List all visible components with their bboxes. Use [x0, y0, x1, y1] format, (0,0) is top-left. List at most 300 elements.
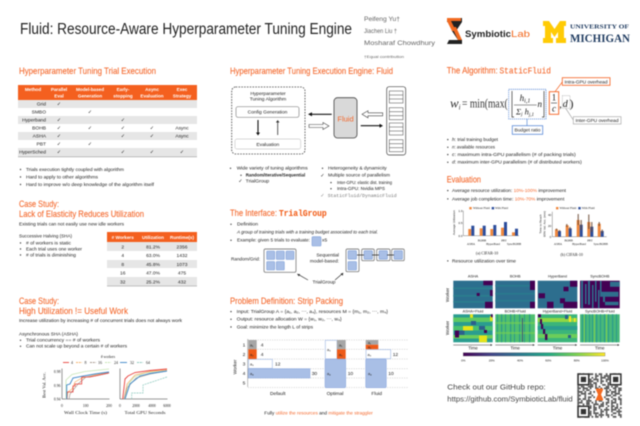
- budget ratio term: i,1: [524, 98, 530, 104]
- table: SHA results: Utilization: [142, 235, 164, 240]
- logo: University of Michigan: [543, 21, 631, 45]
- table: SHA results: 1073: [177, 262, 188, 268]
- table: tuning methods: Async: [145, 87, 159, 92]
- strips: default: a₂: [250, 353, 254, 357]
- chart: time to reach target accuracy: 40: [548, 213, 552, 217]
- label: TrialGroup with arrows: [297, 273, 343, 285]
- chart: strip packing: 1: [243, 343, 246, 349]
- strips: fluid: a₂: [368, 346, 372, 350]
- table: tuning methods: Async: [175, 126, 189, 132]
- table: SHA results: 32: [120, 279, 126, 285]
- table: tuning methods: ✓: [121, 118, 125, 124]
- strips: fluid: 12: [393, 352, 398, 358]
- panel: problem definition strip packing: [230, 296, 408, 416]
- left bullet list: Wide variety of tuning algorithms: [237, 166, 308, 172]
- colorbar: 80%: [574, 359, 580, 363]
- heading: Case Study:: [19, 296, 59, 306]
- chart: average utilization: Average Utilization: [452, 210, 456, 235]
- tuning algorithm box: Hyperparameter: [250, 91, 286, 97]
- chart: time to reach target accuracy: HyperBand: [572, 242, 586, 246]
- chart: time to reach target accuracy: 0: [550, 235, 552, 239]
- chart: average utilization: PBT: [501, 238, 507, 242]
- ASHA bullet list: [19, 332, 128, 350]
- intra-GPU term: c: [552, 104, 556, 114]
- strips: fluid: a₁: [368, 341, 372, 345]
- heading: The Algorithm:: [447, 66, 498, 76]
- diagram: sequential trial groups: [310, 249, 404, 272]
- diagram: sequential trial groups: Sequential: [316, 253, 339, 259]
- table: tuning methods: ✓: [180, 150, 184, 156]
- heatmap titles: ASHA: [468, 275, 479, 279]
- budget ratio term: [509, 89, 546, 119]
- definition text: A group of training trials with a training budget associated to each trial.: [236, 229, 378, 235]
- table: SHA results: 45.8%: [146, 262, 161, 268]
- strips: default: 12: [275, 362, 281, 368]
- table: tuning methods: ✓: [88, 110, 92, 116]
- strips: optimal: 10: [348, 371, 353, 377]
- header: [20, 16, 631, 59]
- bullet list: Average resource utilization: 10%-100% improvement: [452, 188, 567, 194]
- chart: time to reach target accuracy: [539, 206, 608, 257]
- heading: Hyperparameter Tuning Execution Engine: Fluid: [230, 66, 393, 76]
- variable definitions: c: maximum intra-GPU parallelism (# of packing trials): [452, 152, 576, 158]
- inter-GPU term: ,: [559, 100, 562, 111]
- heading: [447, 66, 551, 77]
- logo: SymbioticLab: Symbiotic: [465, 29, 511, 39]
- authors: Mosharaf Chowdhury: [364, 40, 436, 47]
- strips: default: Default: [270, 391, 286, 397]
- table: tuning methods: Generation: [78, 94, 102, 98]
- diagram: random/grid trial group: [231, 249, 296, 272]
- authors: Jiachen Liu †: [364, 28, 397, 35]
- arrows between engine and algorithm: [308, 112, 332, 130]
- chart: average utilization: 0.0: [458, 234, 463, 238]
- authors: †Equal contribution: [364, 55, 404, 59]
- left bullet list: [230, 166, 308, 184]
- heading: [19, 296, 128, 316]
- callout: intra-GPU overhead: Intra-GPU overhead: [564, 79, 608, 85]
- SHA bullet list: Each trial uses one worker: [26, 247, 82, 253]
- budget ratio term: h: [520, 93, 524, 103]
- strips: fluid: [366, 340, 398, 397]
- heatmap: BOHB+Fluid: [495, 314, 535, 342]
- strips: default: a₁: [250, 344, 254, 348]
- axis labels: Best Val. Acc.: [42, 372, 46, 398]
- colorbar: 0%: [461, 359, 466, 363]
- panel: case study lack of elasticity: [19, 199, 197, 286]
- chart: strip packing: 3: [243, 362, 246, 368]
- budget ratio term: j: [520, 112, 523, 117]
- bullet list: [20, 167, 155, 188]
- budget ratio term: j,1: [528, 113, 534, 118]
- table: tuning methods: HyperSched: [19, 150, 46, 156]
- heading: [230, 208, 327, 219]
- table: SHA results: [107, 232, 197, 286]
- bullet list: Average job completion time: 10%-70% improvement: [452, 196, 565, 202]
- authors: [364, 16, 436, 59]
- axis labels: 0.96: [54, 384, 61, 388]
- heatmap titles: [463, 275, 615, 314]
- panel: case study high utilization: [19, 296, 183, 415]
- table: tuning methods: ✓: [121, 126, 125, 132]
- bullet list: Output: resource allocation W = {w₁, w₂, ⋯, w₄}: [237, 317, 342, 323]
- chart: strip packing: [232, 339, 408, 397]
- legend: 8: [84, 360, 86, 365]
- right bullet list: Multiple source of parallelism: [328, 173, 390, 179]
- budget ratio term: Σ: [516, 106, 521, 116]
- arrows between engine and servers: [361, 111, 383, 128]
- formula: [450, 89, 574, 119]
- table: tuning methods: Method: [25, 87, 41, 92]
- table: SHA results: Runtime(s): [170, 235, 194, 240]
- formula: = min(max(: [462, 96, 508, 111]
- heatmap titles: BOHB+Fluid: [505, 310, 526, 314]
- chart: time to reach target accuracy: 20: [548, 224, 552, 228]
- chart: average utilization: BOHB: [478, 238, 486, 242]
- strips: default: a₄: [250, 372, 254, 376]
- tuning algorithm box: Config Generation: [248, 110, 288, 116]
- legend: 16: [98, 360, 102, 365]
- heading: TrialGroup: [279, 209, 327, 219]
- variable definitions: [447, 137, 582, 166]
- heatmap titles: ASHA+Fluid: [463, 310, 483, 314]
- table: tuning methods: ✓: [57, 150, 61, 156]
- tuning algorithm box: Tuning Algorithm: [250, 97, 286, 103]
- time axes: Time: [553, 346, 563, 350]
- chart: average utilization: 0.5: [458, 221, 463, 225]
- table: tuning methods: ASHA: [33, 134, 47, 140]
- table: tuning methods: ✓: [88, 126, 92, 132]
- axis labels: 4000: [148, 404, 156, 408]
- table: tuning methods: ✓: [150, 126, 154, 132]
- axis labels: Total GPU Seconds: [124, 410, 166, 415]
- table: tuning methods: Parallel: [51, 87, 67, 92]
- inter-GPU term: ): [570, 97, 574, 111]
- time axes: [453, 344, 620, 350]
- chart: time to reach target accuracy: SyncBOHB: [594, 242, 608, 246]
- table: tuning methods: Strategy: [173, 94, 192, 98]
- left bullet list: TrialGroup: [246, 178, 269, 184]
- table: tuning methods: ✓: [150, 134, 154, 140]
- axis labels: 0.94: [54, 398, 61, 402]
- callout: inter-GPU overhead: Inter-GPU overhead: [576, 118, 619, 124]
- time axes: Time: [510, 346, 521, 350]
- table: tuning methods: BOHB: [32, 126, 46, 132]
- time axes: Time: [595, 346, 605, 350]
- callout: inter-GPU overhead: [566, 108, 621, 124]
- table: tuning methods: Async: [175, 134, 189, 140]
- table: tuning methods: ✓: [88, 142, 92, 148]
- strips: fluid: a₄: [368, 372, 372, 376]
- variable definitions: d: maximum inter-GPU parallelism (# of distributed workers): [452, 160, 582, 166]
- chart: strip packing: 4: [243, 371, 246, 377]
- call to action: GitHub repo: [447, 382, 573, 404]
- colorbar: 100%: [601, 359, 609, 363]
- heatmap titles: HyperBand+Fluid: [543, 310, 572, 314]
- chart: best validation accuracy: # workers: [101, 355, 116, 359]
- logo: University of Michigan: UNIVERSITY OF: [570, 24, 629, 30]
- table: SHA results: 81.2%: [146, 244, 161, 250]
- time axes: Time: [468, 346, 478, 350]
- table: tuning methods: PBT: [36, 142, 46, 148]
- definition text: [230, 222, 378, 246]
- heading: [19, 199, 144, 219]
- label: TrialGroup with arrows: TrialGroup: [313, 279, 336, 285]
- SHA bullet list: [19, 234, 82, 259]
- table: tuning methods: ✓: [57, 118, 61, 124]
- heading: The Interface:: [230, 208, 277, 218]
- bullet list: Input: TrialGroup A = {a₁, a₂, ⋯, a₄}, resources M = {m₁, m₂, ⋯, m₄}: [237, 309, 388, 315]
- definition text: Definition: [237, 222, 258, 228]
- right bullet list: ✓: [320, 193, 325, 199]
- axis labels: Wall Clock Time (s): [64, 410, 108, 415]
- chart: average utilization: (a) CIFAR-10: [476, 250, 498, 255]
- definition text: Example: given 5 trials to evaluate:: [237, 238, 310, 244]
- intro text: Existing trials can not easily use new idle workers: [19, 222, 125, 228]
- callout: budget ratio: Budget ratio: [514, 128, 541, 134]
- left bullet list: Random/Iterative/Sequential: [246, 173, 305, 178]
- axis labels: 0.98: [54, 370, 61, 374]
- chart: average utilization: Without Fluid: [473, 206, 490, 210]
- formula: w: [450, 96, 459, 111]
- diagram: random/grid trial group: Random/Grid:: [231, 257, 260, 263]
- legend: 32: [130, 360, 134, 365]
- takeaway: Fully utilize the resources and mitigate the straggler: [264, 410, 373, 416]
- heatmaps: utilization over time: Worker: [445, 287, 450, 302]
- table: tuning methods: ✓: [57, 102, 61, 108]
- ASHA bullet list: Trial concurrency == # of workers: [26, 338, 101, 344]
- call to action: GitHub repo: https://github.com/SymbioticLab/fluid: [447, 395, 573, 404]
- strips: default: 4: [261, 352, 264, 358]
- budget ratio term: h: [522, 106, 529, 116]
- intra-GPU term: [549, 92, 559, 114]
- strips: optimal: a₄: [327, 372, 331, 376]
- heatmaps: utilization over time: Worker: [445, 320, 450, 335]
- table: tuning methods: ✓: [121, 134, 125, 140]
- right bullet list: StaticFluid/DynamicFluid: [328, 193, 397, 199]
- strips: default: [248, 340, 317, 397]
- legend: [63, 360, 150, 365]
- heatmap: SyncBOHB+Fluid: [580, 314, 620, 342]
- panel: the algorithm StaticFluid: [447, 66, 621, 166]
- colorbar: 40%: [517, 359, 523, 363]
- left bullet list: ✓: [238, 178, 243, 184]
- call to action: GitHub repo: Check out our GitHub repo:: [447, 382, 546, 391]
- table: SHA results: 2: [121, 244, 124, 250]
- panel: the interface TrialGroup: [230, 208, 404, 285]
- chart: time to reach target accuracy: Without Fluid: [560, 206, 577, 210]
- table: tuning methods: stopping: [113, 94, 133, 98]
- table: tuning methods: ✓: [57, 142, 61, 148]
- fluid engine box: Fluid: [337, 115, 354, 124]
- table: tuning methods: ✓: [121, 150, 125, 156]
- panel: hyperparameter tuning execution engine: [230, 66, 406, 199]
- heatmap titles: SyncBOHB: [590, 275, 610, 279]
- table: SHA results: 16: [120, 270, 126, 276]
- right plot: total GPU seconds: [120, 368, 168, 399]
- strips: default: a₃: [250, 363, 254, 367]
- heatmap titles: SyncBOHB+Fluid: [585, 310, 615, 314]
- heading: High Utilization != Useful Work: [19, 306, 128, 316]
- bullet list: Hard to apply to other algorithms: [26, 175, 99, 181]
- bullet list: Trials execution tightly coupled with algorithm: [26, 167, 124, 173]
- chart: average utilization: ASHA: [467, 242, 476, 246]
- logo: SymbioticLab: Lab: [511, 29, 530, 39]
- fluid engine box: [334, 98, 357, 138]
- heading: Hyperparameter Tuning Trial Execution: [19, 66, 156, 76]
- heatmap: ASHA: [453, 281, 493, 308]
- right bullet list: [320, 166, 397, 199]
- heading: Problem Definition: Strip Packing: [230, 296, 343, 306]
- chart: average utilization: With Fluid: [495, 206, 508, 210]
- variable definitions: h: trial training budget: [452, 137, 499, 143]
- chart: time to reach target accuracy: ASHA: [554, 242, 563, 246]
- budget ratio term: n: [538, 99, 542, 109]
- colorbar: 20%: [489, 359, 495, 363]
- chart: time to reach target accuracy: Time to Reach: [539, 214, 543, 234]
- title: Fluid: Resource-Aware Hyperparameter Tuning Engine: [20, 21, 352, 38]
- axis labels: 200: [106, 404, 112, 408]
- axis labels: 100: [83, 404, 89, 408]
- axis labels: [42, 370, 171, 415]
- chart: best validation accuracy: [42, 355, 171, 415]
- right bullet list: Inter-GPU: elastic dist. training: [337, 180, 392, 186]
- inter-GPU term: [559, 96, 574, 111]
- legend: 4: [71, 360, 73, 365]
- SHA bullet list: # of workers is static: [26, 240, 72, 246]
- strips: default: 4: [261, 343, 264, 349]
- variable definitions: n: available resources: [452, 145, 495, 151]
- diagram: fluid architecture: [232, 87, 406, 155]
- QR code: [577, 374, 622, 417]
- heatmap: HyperBand: [538, 281, 577, 308]
- strips: default: 30: [312, 371, 317, 377]
- heatmap titles: HyperBand: [548, 275, 567, 279]
- table: SHA results: 8: [121, 262, 124, 268]
- chart: average utilization: 1.0: [458, 209, 463, 213]
- table: tuning methods: ✓: [57, 126, 61, 132]
- table: SHA results: 2356: [177, 244, 188, 250]
- strips: optimal: a₃: [327, 348, 331, 352]
- definition text: x5: [322, 238, 327, 244]
- table: tuning methods: Early-: [117, 87, 130, 92]
- logo: University of Michigan: MICHIGAN: [570, 33, 631, 45]
- colorbar: 60%: [545, 359, 552, 363]
- SHA bullet list: Successive Halving (SHA): [19, 234, 72, 240]
- table: tuning methods: Model-based: [76, 87, 104, 92]
- colorbar: [461, 353, 609, 363]
- strips: optimal: a₂: [339, 353, 343, 357]
- chart: time to reach target accuracy: 90% Val. Acc. (min): [542, 211, 546, 237]
- table: SHA results: 4: [121, 253, 124, 259]
- table: tuning methods: ✓: [57, 134, 61, 140]
- chart: strip packing: 5: [243, 381, 246, 387]
- chart: average utilization: [452, 206, 521, 255]
- left plot: wall clock time: [62, 368, 110, 399]
- table: tuning methods: SMBO: [32, 110, 46, 116]
- bullet list: Goal: minimize the length L of strips: [237, 324, 314, 330]
- bullet list: Hard to improve w/o deep knowledge of the algorithm itself: [26, 182, 155, 188]
- bullet: resource utilization: Resource utilization over time: [452, 258, 516, 264]
- chart: time to reach target accuracy: (b) CIFAR-10: [560, 252, 583, 257]
- bullet list: [230, 309, 388, 330]
- heading: Evaluation: [447, 175, 481, 185]
- strips: optimal: [325, 340, 353, 397]
- callout: intra-GPU overhead: [555, 78, 610, 92]
- authors: Peifeng Yu†: [364, 16, 400, 23]
- table: tuning methods: [18, 85, 197, 157]
- table: tuning methods: ✓: [150, 150, 154, 156]
- strips: optimal: Optimal: [327, 391, 343, 397]
- inter-GPU term: d: [563, 99, 569, 110]
- panel: hyperparameter tuning trial execution: [18, 66, 197, 188]
- heading: Case Study:: [19, 199, 59, 209]
- right bullet list: ✓: [320, 173, 325, 179]
- axis labels: 2000: [132, 404, 140, 408]
- table: SHA results: 1432: [177, 253, 188, 259]
- legend: 64: [146, 360, 150, 365]
- chart: strip packing: Worker: [232, 359, 238, 374]
- strips: fluid: a₃: [368, 353, 372, 357]
- chart: time to reach target accuracy: PBT: [587, 238, 593, 242]
- right bullet list: Intra-GPU: Nvidia MPS: [337, 186, 386, 192]
- heatmap: BOHB: [495, 281, 535, 308]
- table: SHA results: 475: [178, 270, 186, 276]
- heatmap titles: BOHB: [510, 275, 521, 279]
- chart: time to reach target accuracy: BOHB: [565, 238, 573, 242]
- heatmap: SyncBOHB: [580, 281, 620, 308]
- table: tuning methods: Exec: [177, 87, 188, 92]
- logo: SymbioticLab: [447, 18, 530, 44]
- chart: average utilization: HyperBand: [486, 242, 500, 246]
- panel: evaluation: [445, 175, 620, 363]
- tuning algorithm box: [232, 87, 305, 154]
- chart: average utilization: SyncBOHB: [507, 242, 521, 246]
- right bullet list: Heterogeneity & dynamicity: [328, 166, 387, 172]
- intro text: Increase utilization by increasing # of concurrent trials does not always work: [19, 318, 183, 324]
- formula: i: [459, 104, 461, 112]
- callout: budget ratio: [512, 119, 543, 134]
- tuning algorithm box: Evaluation: [256, 142, 279, 148]
- table: SHA results: 63.0%: [146, 253, 161, 259]
- heatmap: ASHA+Fluid: [453, 314, 493, 342]
- table: tuning methods: Grid: [37, 102, 46, 108]
- table: SHA results: 432: [178, 279, 186, 285]
- table: tuning methods: Evaluation: [140, 94, 164, 98]
- axis labels: 0: [61, 404, 63, 408]
- SHA bullet list: # of trials is diminishing: [26, 253, 76, 259]
- ASHA bullet list: Asynchronous SHA (ASHA): [19, 332, 78, 338]
- intra-GPU term: 1: [552, 93, 556, 103]
- diagram: sequential trial groups: model-based:: [310, 258, 339, 264]
- legend: 24: [114, 360, 118, 365]
- ASHA bullet list: Can not scale up beyond a certain # of workers: [26, 344, 128, 350]
- strips: optimal: a₁: [339, 344, 343, 348]
- heading: Lack of Elasticity Reduces Utilization: [19, 209, 144, 219]
- heatmaps: utilization over time: [445, 275, 620, 363]
- axis labels: 0: [119, 404, 121, 408]
- table: SHA results: 47.0%: [146, 270, 161, 276]
- table: tuning methods: Eval: [54, 94, 64, 98]
- heatmap: HyperBand+Fluid: [538, 314, 577, 342]
- table: tuning methods: Hyperband: [22, 118, 46, 124]
- strips: fluid: 10: [388, 371, 394, 377]
- bullet list: [447, 188, 567, 202]
- axis labels: 6000: [163, 404, 171, 408]
- chart: strip packing: 2: [243, 352, 246, 358]
- table: SHA results: 25.2%: [146, 279, 161, 285]
- strips: fluid: Fluid: [371, 391, 382, 397]
